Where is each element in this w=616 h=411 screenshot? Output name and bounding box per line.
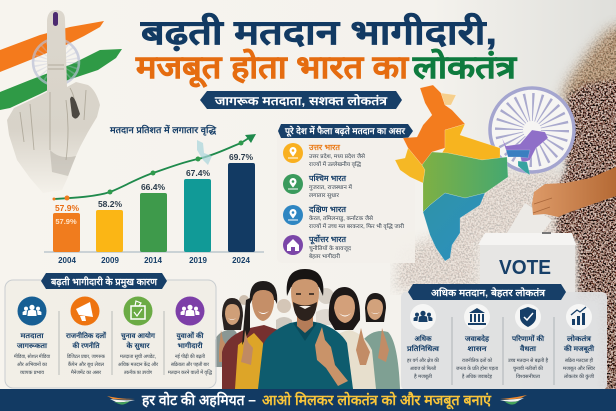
chart title: मतदान प्रतिशत में लगातार वृद्धि — [109, 124, 217, 136]
title — [135, 12, 518, 88]
year labels: 2024 — [232, 256, 250, 265]
baseline — [44, 251, 264, 253]
region: north: उत्तर प्रदेश, मध्य प्रदेश जैसे — [309, 153, 365, 160]
reason 3: election commission: मतदाता सूची अपडेट, — [120, 353, 156, 360]
benefit 4: stronger democracy — [563, 304, 596, 380]
orange stroke — [0, 21, 104, 72]
background voters — [239, 288, 336, 330]
reason 1: voter awareness: मीडिया, सोशल मीडिया — [14, 353, 51, 360]
reason 3: election commission: चुनाव आयोग — [120, 331, 156, 341]
reason 2: party strategy: राजनीतिक दलों — [65, 331, 107, 340]
reason 2: party strategy: डिजिटल प्रचार, जागरूक — [67, 353, 105, 360]
ballot paper — [507, 203, 552, 234]
reasons heading ribbon — [41, 273, 167, 289]
reason 1: voter awareness: व्यापक प्रभाव — [20, 370, 44, 376]
region: west: गुजरात, राजस्थान में — [309, 184, 353, 191]
region: northeast: पूर्वोत्तर भारत — [308, 234, 346, 245]
year labels: 2009 — [101, 256, 119, 265]
year labels: 2014 — [144, 256, 162, 265]
central region — [422, 152, 508, 212]
panel heading ribbon — [278, 124, 413, 138]
benefit 2: accountable governance — [456, 304, 499, 380]
value labels: 57.9% — [55, 203, 79, 213]
dividers — [59, 311, 164, 375]
title: लोकतंत्र — [412, 48, 518, 85]
benefit 3: legitimacy of results: चुनावी नतीजों की — [513, 365, 544, 372]
benefit 3: legitimacy of results: विश्वसनीयता — [516, 373, 541, 380]
panel: regional impact: पूरे देश में फैला बढ़ते मतदान का असर — [284, 125, 405, 137]
kashmir highlight — [441, 93, 456, 105]
reason 4: youth participation: भागीदारी — [178, 341, 204, 350]
region: northeast — [283, 234, 351, 260]
right flag swoosh — [500, 395, 527, 405]
region: west: पश्चिम भारत — [308, 173, 346, 183]
region: west: लगातार सुधार — [309, 193, 340, 199]
crowd photograph background — [390, 15, 616, 400]
gujarat region — [395, 148, 425, 183]
region: south: केरल, तमिलनाडु, कर्नाटक जैसे — [309, 215, 373, 222]
panel: regional impact — [277, 124, 415, 263]
benefit 4: stronger democracy: सक्रिय मतदाता ही — [565, 357, 594, 364]
north region — [403, 85, 465, 165]
value labels: 67.4% — [186, 168, 210, 178]
benefit 3: legitimacy of results — [508, 304, 548, 380]
benefit 1: representation: हर वर्ग और क्षेत्र की — [407, 357, 440, 364]
vote label: VOTE — [499, 257, 551, 279]
chakra watermark — [490, 88, 574, 172]
left flag swoosh — [107, 396, 135, 405]
title: बढ़ती मतदान भागीदारी, — [140, 12, 497, 52]
value labels: 57.9% — [55, 217, 77, 226]
man in teal shirt — [258, 269, 353, 389]
chakra behind finger — [33, 39, 79, 85]
northeast region — [502, 130, 548, 163]
map of India — [395, 85, 548, 261]
woman far left — [215, 298, 243, 367]
benefit 2: accountable governance: जनता के प्रति होना पड़ता — [456, 365, 499, 372]
region: north — [283, 143, 365, 168]
reason 3: election commission — [118, 296, 159, 376]
year labels: 2019 — [189, 256, 207, 265]
flag brush strokes with chakra — [0, 21, 122, 110]
reason 4: youth participation — [168, 296, 213, 376]
benefit 4: stronger democracy: की मजबूती — [563, 344, 595, 354]
reason 3: election commission: तकनीक का उपयोग — [124, 369, 152, 376]
subtitle ribbon: जागरूक मतदाता, सशक्त लोकतंत्र — [214, 94, 389, 108]
reason 2: party strategy: मैनेजमेंट का असर — [71, 369, 102, 376]
reason 4: youth participation: युवाओं की — [175, 331, 205, 341]
footer slogan — [141, 391, 492, 410]
bar chart: turnout growth — [44, 124, 264, 265]
reason 4: youth participation: मतदान करने वालों में वृद्धि — [168, 369, 213, 376]
icon: hand casting ballot — [532, 167, 616, 217]
benefit 3: legitimacy of results: वैधता — [519, 344, 537, 353]
reason 1: voter awareness: मतदाता — [19, 333, 45, 340]
panel: key reasons: बढ़ती भागीदारी के प्रमुख कारण — [50, 276, 158, 288]
ballot box — [478, 203, 576, 292]
benefit 1: representation: अधिक — [414, 334, 432, 343]
benefit 1: representation: है मजबूती — [414, 373, 433, 380]
region: south: दक्षिण भारत — [308, 204, 346, 214]
benefit 2: accountable governance: राजनीतिक दलों को — [462, 357, 493, 364]
reason 3: election commission: के सुधार — [125, 341, 151, 351]
benefit 2: accountable governance: है अधिक जवाबदेह — [462, 373, 492, 380]
reason 4: youth participation: नई पीढ़ी की बढ़ती — [175, 353, 206, 360]
southern region — [423, 193, 485, 261]
benefit 3: legitimacy of results: उच्च मतदान से बढ़ती है — [508, 357, 548, 364]
value labels: 69.7% — [229, 152, 253, 162]
year labels: 2004 — [58, 256, 76, 265]
title: मजबूत होता भारत का — [135, 48, 410, 88]
woman second right — [363, 293, 400, 389]
benefit 3: legitimacy of results: परिणामों की — [511, 334, 545, 343]
icon: inked voting hand — [7, 10, 100, 193]
reason 1: voter awareness: और अभियानों का — [17, 361, 48, 368]
reason 2: party strategy: कैंपेन और बूथ लेवल — [68, 361, 105, 368]
central-north region — [442, 124, 500, 160]
trend line arrow — [52, 134, 256, 200]
benefit 2: accountable governance: शासन — [468, 346, 488, 353]
benefit 4: stronger democracy: लोकतंत्र की कुंजी — [564, 373, 595, 380]
ink mark on fingertip — [53, 12, 58, 26]
ink splash over 2019 — [197, 140, 212, 165]
reason 2: party strategy — [65, 296, 107, 376]
region: west — [283, 173, 353, 199]
dividers — [452, 317, 554, 385]
reason 2: party strategy: की रणनीति — [72, 341, 100, 350]
reason 1: voter awareness: जागरूकता — [16, 343, 48, 350]
benefit 1: representation: आवाज को मिलती — [410, 365, 437, 372]
reason 3: election commission: अधिक मतदान केंद्र और — [118, 361, 159, 368]
group of voters — [215, 269, 400, 389]
bars — [53, 163, 255, 252]
year labels — [58, 256, 250, 265]
green stroke — [0, 49, 122, 110]
region: northeast: चुनौतियों के बावजूद — [309, 245, 351, 252]
footer slogan: हर वोट की अहमियत – — [141, 391, 256, 409]
box lid — [478, 233, 576, 245]
value labels — [55, 152, 253, 226]
box front — [480, 245, 575, 292]
benefit 1: representation — [406, 304, 440, 380]
region: south — [283, 204, 405, 230]
value labels: 58.2% — [98, 199, 122, 209]
panel: key reasons — [5, 273, 216, 388]
benefit 1: representation: प्रतिनिधित्व — [406, 344, 440, 353]
region: south: राज्यों में उच्च मत बरकरार, फिर भी वृद्धि जारी — [309, 223, 405, 230]
benefit 4: stronger democracy: लोकतंत्र — [566, 334, 592, 343]
panel: better democracy — [401, 284, 607, 390]
reason 4: youth participation: सक्रियता और पहली बार — [171, 361, 210, 368]
man in maroon shirt — [222, 281, 284, 389]
benefit 4: stronger democracy: मजबूत और स्थिर — [563, 365, 596, 372]
democracy heading ribbon — [408, 284, 566, 300]
value labels: 66.4% — [141, 182, 165, 192]
reason 1: voter awareness — [14, 296, 51, 376]
woman right — [326, 287, 376, 389]
region: north: उत्तर भारत — [308, 143, 340, 152]
subtitle ribbon — [200, 91, 402, 109]
benefit 2: accountable governance: जवाबदेह — [464, 334, 489, 343]
footer banner — [0, 389, 616, 411]
panel: better democracy: अधिक मतदान, बेहतर लोकतंत्र — [431, 287, 546, 299]
region: north: राज्यों में उल्लेखनीय वृद्धि — [309, 161, 362, 168]
raised inked finger — [315, 327, 348, 386]
footer slogan: आओ मिलकर लोकतंत्र को और मजबूत बनाएं — [262, 391, 492, 410]
region: northeast: बेहतर भागीदारी — [309, 253, 341, 260]
